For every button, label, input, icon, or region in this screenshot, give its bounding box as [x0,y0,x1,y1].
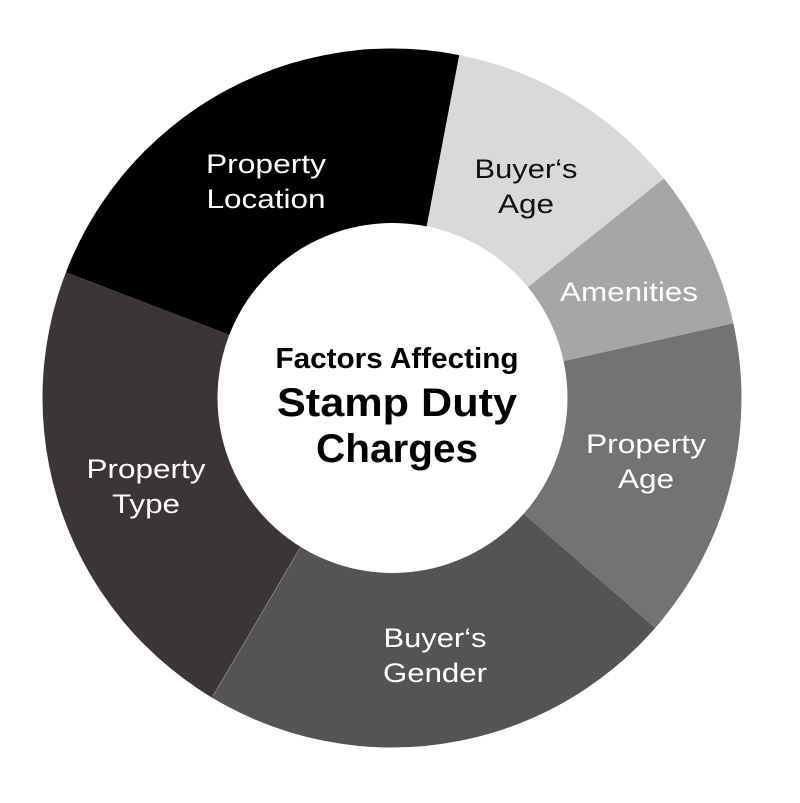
center title: Factors Affecting [276,343,518,375]
segment: amenities [528,178,734,361]
center title: Charges [316,427,478,471]
donut infographic [42,48,742,748]
segment: property location: Property [206,149,327,179]
segment: buyer's gender: Buyer‘s [384,623,486,653]
segment: property location [66,48,460,335]
segment: property age: Property [586,429,707,459]
segment: property location: Location [206,184,326,214]
segment: property age: Age [618,464,674,494]
center title [218,223,568,573]
segment: buyer's age [426,55,664,287]
segment: buyer's gender: Gender [383,658,487,688]
segment: property type [42,272,300,698]
segment: property type: Type [112,489,180,519]
segment: property type: Property [86,454,206,484]
segment: property age [524,323,742,628]
segment: buyer's age: Age [498,189,554,219]
segment: buyer's age: Buyer‘s [474,154,578,184]
segment: buyer's gender [212,514,656,748]
segment: amenities: Amenities [560,277,698,307]
center title: Stamp Duty [277,381,518,425]
